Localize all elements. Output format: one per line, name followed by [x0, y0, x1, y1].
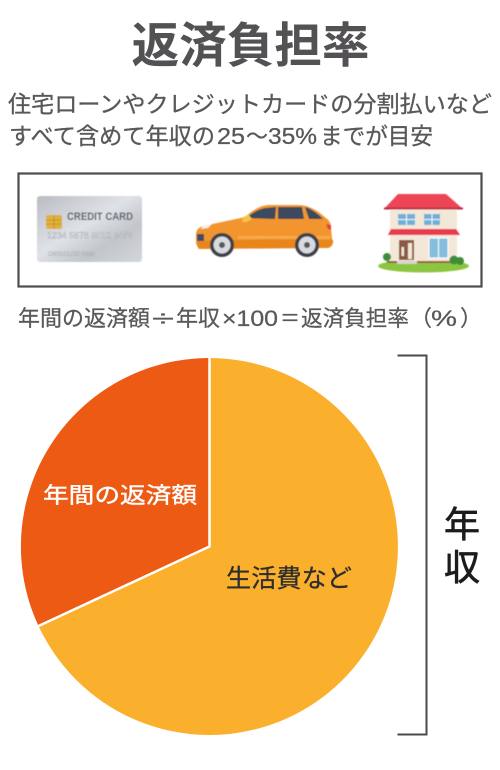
panel: debt examples: [18, 174, 482, 286]
intro text: 住宅ローンやクレジットカードの分割払いなど: [8, 91, 492, 117]
intro text: [8, 91, 492, 149]
formula: （: [410, 306, 432, 331]
icon: credit card: [37, 196, 142, 262]
label: annual repayment: 年間の返済額: [43, 483, 197, 508]
icon: credit card: CREDIT CARD: [67, 211, 133, 223]
formula: 返済負担率: [301, 306, 409, 331]
formula: 年間の返済額: [18, 306, 150, 331]
annual income label: 年: [444, 504, 480, 545]
slice: annual repayment: [21, 358, 209, 626]
intro text: ～: [246, 123, 268, 149]
formula: [18, 306, 482, 331]
icon: credit card: 1234 5678 9012 3456: [47, 230, 133, 240]
icon: credit card: CARDHOLDER NAME: [48, 252, 95, 258]
intro text: 25: [217, 123, 245, 149]
formula: ×100: [222, 306, 278, 331]
pie chart: [21, 358, 398, 735]
formula: ＝: [280, 306, 300, 331]
annual income label: [444, 504, 480, 588]
formula: %: [431, 306, 457, 331]
intro text: すべて含めて年収の: [9, 123, 215, 149]
icon: orange car: [196, 205, 333, 257]
label: living expenses: 生活費など: [226, 565, 352, 593]
icon: house: [378, 194, 469, 272]
title: 返済負担率: [132, 20, 370, 73]
intro text: までが目安: [320, 123, 433, 149]
intro text: 35%: [268, 123, 317, 149]
slice: living expenses: [38, 358, 398, 735]
formula: ÷: [152, 306, 174, 331]
formula: 年収: [176, 306, 220, 331]
bracket: [398, 356, 426, 734]
annual income label: 収: [444, 547, 480, 588]
formula: ）: [460, 306, 482, 331]
